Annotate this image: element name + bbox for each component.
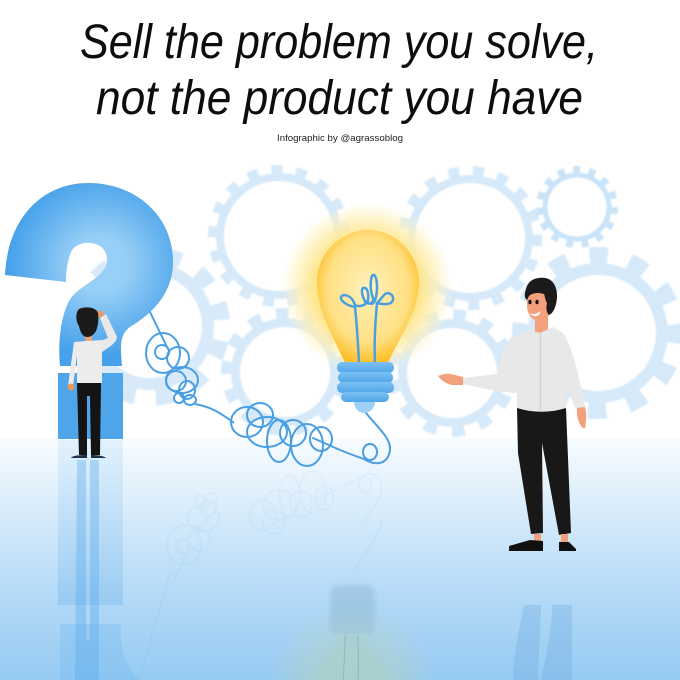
title: Sell the problem you solve, xyxy=(80,16,598,69)
bulb glass xyxy=(317,230,419,363)
bulb filament xyxy=(341,275,393,362)
reflection: bulb base xyxy=(330,585,375,635)
right man's shoes xyxy=(509,540,576,551)
reflection: question mark stem xyxy=(60,624,140,680)
gear: small top right xyxy=(540,170,614,244)
left man's shirt xyxy=(68,340,102,386)
reflection: question mark dot xyxy=(58,440,123,605)
title xyxy=(80,16,598,125)
bulb screw base xyxy=(337,362,394,402)
right man's outstretched hand xyxy=(438,374,463,385)
gear: top centre left xyxy=(201,158,357,314)
right man's right hand xyxy=(577,407,586,428)
right man's feet xyxy=(534,534,568,543)
left man's trousers xyxy=(77,383,101,455)
tangled line xyxy=(146,312,390,466)
right man's shirt buttons xyxy=(540,333,542,411)
connecting line xyxy=(195,404,234,423)
question mark xyxy=(5,183,173,439)
reflection: middle tangle xyxy=(250,471,382,534)
left man's arm raised xyxy=(98,314,117,352)
right man's face xyxy=(527,290,550,321)
right man's trousers xyxy=(517,408,571,535)
reflection: bulb glass xyxy=(310,636,392,680)
reflection: left tangle xyxy=(167,493,219,586)
question mark dot xyxy=(58,373,123,439)
title: not the product you have xyxy=(96,72,583,125)
right man's eye right xyxy=(535,300,539,304)
gear: lower centre left xyxy=(212,299,358,445)
tangle near question mark xyxy=(146,312,198,405)
reflection: filament xyxy=(343,636,358,680)
bulb tip xyxy=(354,402,375,413)
reflection: left man's legs xyxy=(75,460,99,680)
reflection: bulb glow xyxy=(267,605,437,680)
right man's shirt xyxy=(463,327,585,412)
tangle near bulb xyxy=(231,403,390,466)
reflections on floor xyxy=(58,440,572,680)
reflection: right man's legs xyxy=(513,605,572,680)
gear: top centre right xyxy=(400,168,540,308)
reflection: connecting lines xyxy=(139,520,382,680)
floor gradient xyxy=(0,438,680,680)
right man's eye left xyxy=(528,300,532,304)
gear: left behind question mark xyxy=(65,241,235,411)
left man's hair xyxy=(76,307,98,337)
gears background xyxy=(65,158,680,445)
left man from behind xyxy=(68,307,117,458)
right man's hair xyxy=(525,278,557,315)
left man's neck xyxy=(85,334,92,341)
gear: lower centre right xyxy=(388,309,516,437)
byline: Infographic by @agrassoblog xyxy=(277,133,403,144)
right man presenting xyxy=(438,278,586,551)
left man's lower hand xyxy=(68,384,74,390)
light bulb xyxy=(281,202,453,413)
right man's smile xyxy=(530,311,541,316)
left man's hand xyxy=(96,310,104,318)
right man's neck xyxy=(535,315,548,334)
gear: big right xyxy=(512,247,680,419)
question mark hook xyxy=(5,183,173,366)
bulb glow xyxy=(281,202,453,374)
left man's shoes xyxy=(71,455,106,458)
